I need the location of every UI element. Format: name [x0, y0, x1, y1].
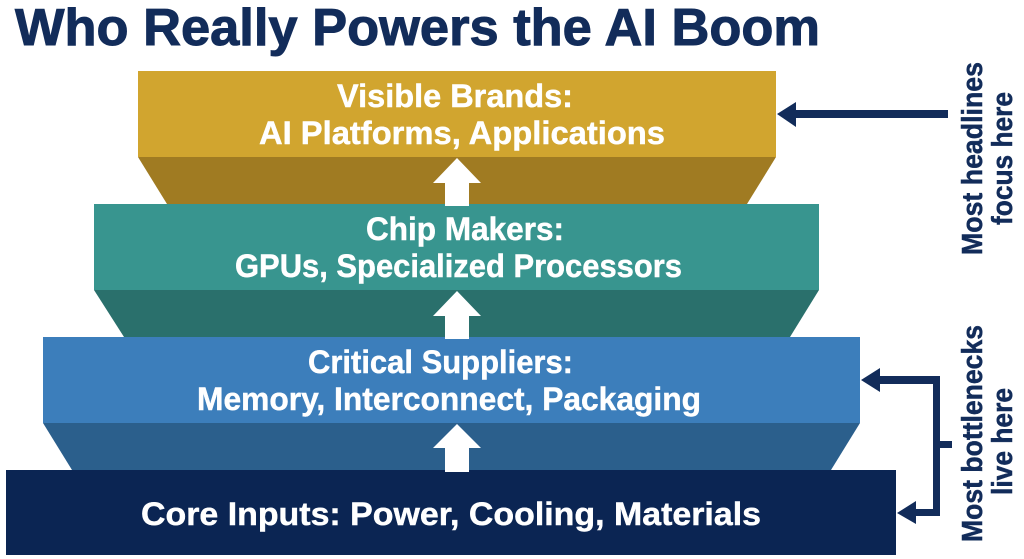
chip makers label — [235, 211, 682, 284]
callout: most headlines focus here: focus here — [987, 92, 1019, 225]
tier: visible brands — [138, 71, 776, 204]
callout: most bottlenecks live here — [957, 325, 1019, 542]
tier: core inputs — [6, 470, 896, 555]
callout: most headlines focus here: Most headlines — [957, 62, 989, 255]
tier: critical suppliers — [43, 337, 860, 470]
bracket arrow: bottlenecks callout — [861, 368, 952, 524]
visible brands label — [259, 78, 665, 151]
arrow: headlines callout — [777, 102, 948, 127]
tier: chip makers — [94, 204, 819, 337]
visible brands label: Visible Brands: — [337, 78, 573, 114]
chip makers label: GPUs, Specialized Processors — [235, 248, 682, 284]
chip makers label: Chip Makers: — [366, 211, 564, 247]
arrow: critical suppliers to chip makers — [433, 291, 481, 339]
title: Who Really Powers the AI Boom — [15, 0, 820, 57]
critical suppliers label: Critical Suppliers: — [308, 344, 573, 380]
arrow: core inputs to critical suppliers — [433, 424, 481, 472]
callout: most headlines focus here — [957, 62, 1019, 255]
core inputs label: Core Inputs: Power, Cooling, Materials — [141, 496, 761, 532]
callout: most bottlenecks live here: Most bottlenecks — [957, 325, 989, 542]
critical suppliers label: Memory, Interconnect, Packaging — [197, 381, 701, 417]
visible brands label: AI Platforms, Applications — [259, 115, 665, 151]
callout: most bottlenecks live here: live here — [987, 388, 1019, 495]
arrow: chip makers to visible brands — [433, 158, 481, 206]
critical suppliers label — [197, 344, 701, 417]
